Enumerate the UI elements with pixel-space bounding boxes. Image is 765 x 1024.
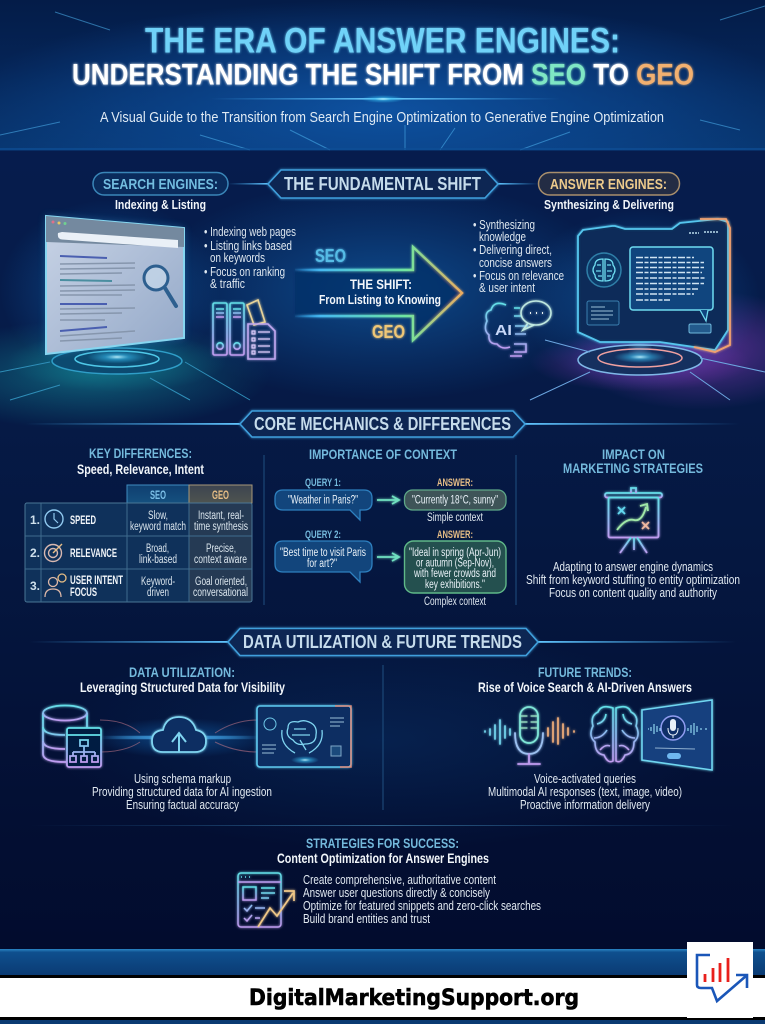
answer engines bullet list [473,217,564,295]
row: user intent focus: driven [147,587,169,599]
panel: search engines [0,172,296,400]
row: relevance: link-based [139,554,177,566]
answer engines subheading: Synthesizing & Delivering [544,197,674,212]
answer 1: Simple context [427,512,484,524]
icon: content growth [238,873,294,927]
row: relevance: 2. [30,546,40,560]
row: speed: Slow, [148,510,168,522]
icon: cloud upload [152,717,206,752]
heading: core mechanics and differences [25,411,740,437]
search engines bullet list: & traffic [210,276,245,291]
icon: browser window [46,216,184,354]
future trends text: Voice-activated queries [534,771,636,786]
impact heading: IMPACT ON [602,446,665,462]
data utilization heading: Leveraging Structured Data for Visibility [80,679,285,695]
search engines bullet list: • Listing links based [204,238,292,253]
future trends heading [478,664,692,695]
search engines bullet list: • Indexing web pages [204,224,296,239]
row: speed: Instant, real- [198,510,244,522]
key differences heading: KEY DIFFERENCES: [89,445,192,461]
query 1 [275,477,372,520]
arrow: from listing to knowing [295,247,462,340]
strategies heading: STRATEGIES FOR SUCCESS: [306,835,459,851]
row: user intent focus: FOCUS [70,585,97,599]
future trends text [488,771,682,812]
answer engines pill [538,172,680,195]
panel: the shift arrow [295,246,462,342]
query 1: "Weather in Paris?" [288,494,358,506]
data flow beam [95,718,265,758]
future trends heading: FUTURE TRENDS: [538,664,632,680]
answer engines bullet list: knowledge [479,229,526,244]
row: relevance: context aware [194,554,247,566]
footer band [0,949,765,1024]
panel: impact on marketing strategies [526,446,740,600]
panel: strategies for success [30,825,735,927]
key differences heading: Speed, Relevance, Intent [77,461,204,477]
heading: the fundamental shift [228,170,538,198]
column headers: GEO [212,490,229,502]
impact heading [563,446,703,476]
impact heading: MARKETING STRATEGIES [563,460,703,476]
icon: strategy board [605,488,662,553]
panel: future trends [478,664,712,812]
row: speed: 1. [30,513,40,527]
panel: importance of context [264,446,516,608]
answer 2: with fewer crowds and [413,568,496,580]
strategies text: Create comprehensive, authoritative content [303,872,496,887]
answer engines pill: ANSWER ENGINES: [550,176,667,193]
row: user intent focus: 3. [30,579,40,593]
answer 2: Complex context [424,596,487,608]
importance of context heading: IMPORTANCE OF CONTEXT [309,446,457,462]
search engines subheading: Indexing & Listing [115,197,206,212]
icon: AI brain with chat bubble [485,301,551,356]
icon: database with sitemap [43,706,101,767]
future trends text: Multimodal AI responses (text, image, video) [488,784,682,799]
search engines bullet list [204,224,296,291]
answer 2: or autumn (Sep-Nov), [416,558,494,570]
header band [0,6,765,150]
icon: AI brain dashboard [257,706,351,767]
row: user intent focus: conversational [193,587,248,599]
search engines pill [93,172,228,195]
search engines bullet list: • Focus on ranking [204,264,285,279]
shift label: THE SHIFT: [350,277,412,292]
strategies text [303,872,541,926]
panel: key differences [25,445,252,602]
answer 1: "Currently 18°C, sunny" [412,494,498,506]
footer brand text: DigitalMarketingSupport.org [249,986,579,1011]
icon: answer screen [578,219,730,352]
row: relevance: Precise, [206,543,236,555]
answer 2: ANSWER: [437,529,473,541]
title: UNDERSTANDING THE SHIFT FROM SEO TO GEO [72,58,694,92]
impact text: Adapting to answer engine dynamics [553,559,713,574]
query 2: "Best time to visit Paris [280,547,366,559]
future trends text: Proactive information delivery [520,797,650,812]
shift label: From Listing to Knowing [319,292,441,307]
icon: voice assistant panel [642,700,712,770]
data utilization text: Providing structured data for AI ingestion [92,784,272,799]
impact text [526,559,740,600]
data utilization text: Ensuring factual accuracy [126,797,239,812]
search engines pill: SEARCH ENGINES: [103,176,218,193]
row: relevance [30,543,247,566]
strategies text: Answer user questions directly & concisely [303,885,490,900]
query 2: QUERY 2: [305,529,341,541]
data utilization text [92,771,272,812]
title [72,22,694,92]
answer 2 [404,529,506,608]
panel: data utilization [43,664,383,812]
answer engines bullet list: & user intent [479,280,535,295]
answer 2: "Ideal in spring (Apr-Jun) [409,547,501,559]
icon: holographic platform [0,332,250,400]
data utilization heading: DATA UTILIZATION: [129,664,235,680]
icon: holographic answer platform [530,325,765,400]
answer engines bullet list: • Focus on relevance [473,268,564,283]
answer 1 [404,477,506,524]
heading: the fundamental shift: THE FUNDAMENTAL SHIFT [284,174,481,194]
data utilization heading [80,664,285,695]
row: relevance: Broad, [146,543,169,555]
icon: brain [591,707,638,762]
search engines bullet list: on keywords [210,250,265,265]
query 2: for art?" [307,558,337,570]
title: THE ERA OF ANSWER ENGINES: [145,22,620,60]
key differences heading [77,445,204,477]
SEO label: SEO [315,246,346,266]
row: speed [30,510,248,533]
future trends heading: Rise of Voice Search & AI-Driven Answers [478,679,692,695]
brain glyph on screen [593,259,615,281]
heading: core mechanics and differences: CORE MECHANICS & DIFFERENCES [254,414,511,434]
column headers [150,490,229,502]
heading: data utilization and future trends: DATA UTILIZATION & FUTURE TRENDS [243,632,522,652]
answer engines bullet list: • Delivering direct, [473,242,552,257]
answer 1: ANSWER: [437,477,473,489]
logo: chart speech bubble [687,942,753,1018]
strategies text: Build brand entities and trust [303,911,430,926]
row: user intent focus: Keyword- [141,576,175,588]
icon: microphone with sound waves [485,707,574,764]
strategies heading [277,835,489,866]
comparison table [25,485,252,602]
strategies text: Optimize for featured snippets and zero-click searches [303,898,541,913]
panel: answer engines [473,172,765,400]
AI label: AI [495,322,512,339]
heading: data utilization and future trends [30,628,736,656]
row: user intent focus [30,573,248,599]
shift label [319,277,441,307]
impact text: Focus on content quality and authority [549,585,717,600]
row: speed: keyword match [130,521,186,533]
subtitle: A Visual Guide to the Transition from Search Engine Optimization to Generative Engine Optimization [100,109,664,126]
query 2 [275,529,372,582]
answer engines bullet list: • Synthesizing [473,217,535,232]
arrow: query 1 to answer [377,496,399,504]
answer 2: key exhibitions." [425,579,485,591]
row: user intent focus: Goal oriented, [195,576,247,588]
row: speed: SPEED [70,513,96,527]
GEO label: GEO [372,322,405,342]
icon: binders and checklist [213,300,275,359]
arrow: query 2 to answer [377,553,399,561]
strategies heading: Content Optimization for Answer Engines [277,850,489,866]
title divider glow [210,95,560,103]
query 1: QUERY 1: [305,477,341,489]
answer engines bullet list: concise answers [479,255,552,270]
column headers: SEO [150,490,166,502]
row: user intent focus: USER INTENT [70,573,123,587]
row: speed: time synthesis [194,521,248,533]
row: relevance: RELEVANCE [70,546,117,560]
data utilization text: Using schema markup [134,771,231,786]
